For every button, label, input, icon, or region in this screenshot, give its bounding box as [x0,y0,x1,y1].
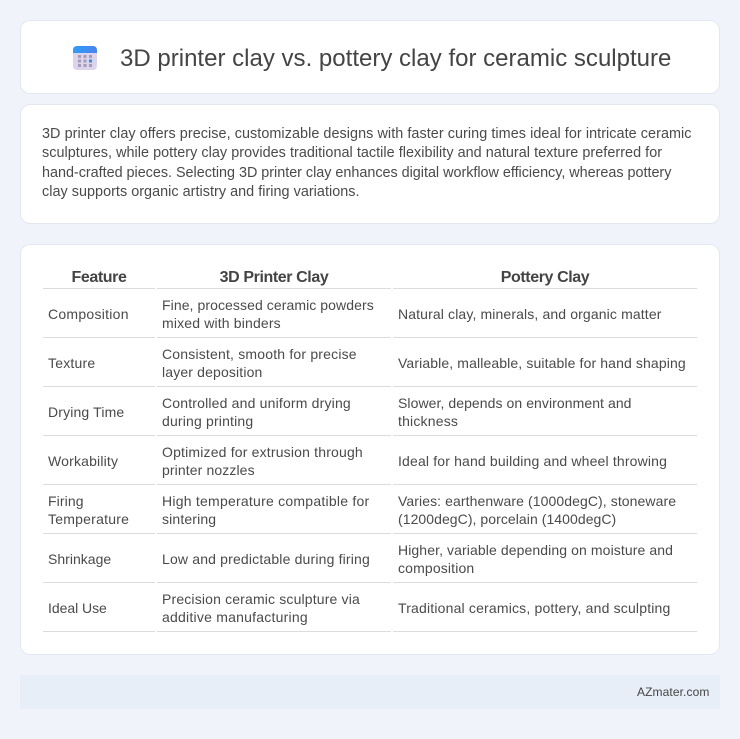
text block: summary: hand-crafted pieces. Selecting 3D printer clay enhances digital workflow efficiency, whereas pottery [42,165,671,181]
row: Workability: Ideal for hand building and wheel throwing [398,453,667,469]
table header: Pottery Clay: Pottery Clay [501,269,589,286]
row: Firing Temperature: (1200degC), porcelain (1400degC) [398,511,616,527]
row: Firing Temperature [48,493,676,527]
row: Firing Temperature: Firing [48,493,84,509]
row: Drying Time: during printing [162,413,253,429]
row: Workability: Optimized for extrusion through [162,444,363,460]
text block: summary: sculptures, while pottery clay provides traditional tactile flexibility and natural texture preferred for [42,145,662,161]
row: Shrinkage: Higher, variable depending on moisture and [398,542,673,558]
text block: summary [42,126,692,200]
row: Composition [48,297,662,331]
row: Texture [48,346,686,380]
footer bar [20,675,720,709]
row: Firing Temperature: sintering [162,511,216,527]
row: Drying Time: Slower, depends on environment and [398,395,632,411]
row: Composition: Fine, processed ceramic powders [162,297,374,313]
footer: attribution: AZmater.com [637,685,709,699]
text block: summary: 3D printer clay offers precise, customizable designs with faster curing times ideal for intricate ceramic [42,126,692,142]
row: Ideal Use: Precision ceramic sculpture via [162,591,360,607]
row: Firing Temperature: Temperature [48,511,129,527]
table header: Feature: Feature [72,269,126,286]
row: Drying Time: Drying Time [48,404,124,420]
row: Drying Time: Controlled and uniform drying [162,395,351,411]
row: Texture: Texture [48,355,95,371]
title: 3D printer clay vs. pottery clay for ceramic sculpture [120,45,671,72]
row: Ideal Use: Ideal Use [48,600,107,616]
row: Composition: mixed with binders [162,315,281,331]
row: Shrinkage: Low and predictable during firing [162,551,370,567]
row: Ideal Use: additive manufacturing [162,609,308,625]
row: Workability [48,444,667,478]
row: Ideal Use [48,591,670,625]
row: Composition: Composition [48,306,129,322]
row: Drying Time: thickness [398,413,458,429]
table header: 3D Printer Clay: 3D Printer Clay [220,269,328,286]
text block: summary: clay supports organic artistry and firing variations. [42,184,360,200]
row: Drying Time [48,395,632,429]
panel: comparison table card [20,244,720,655]
icon: calendar [73,46,97,70]
row: Firing Temperature: High temperature compatible for [162,493,369,509]
row: Firing Temperature: Varies: earthenware (1000degC), stoneware [398,493,676,509]
row: Texture: Variable, malleable, suitable for hand shaping [398,355,686,371]
row: Composition: Natural clay, minerals, and organic matter [398,306,662,322]
row: Shrinkage [48,542,673,576]
row: Texture: layer deposition [162,364,262,380]
row: Shrinkage: Shrinkage [48,551,111,567]
row: Texture: Consistent, smooth for precise [162,346,357,362]
row: Shrinkage: composition [398,560,474,576]
row: Workability: Workability [48,453,118,469]
panel: title card [20,20,720,94]
row: Workability: printer nozzles [162,462,255,478]
row: Ideal Use: Traditional ceramics, pottery, and sculpting [398,600,670,616]
panel: summary card [20,104,720,224]
